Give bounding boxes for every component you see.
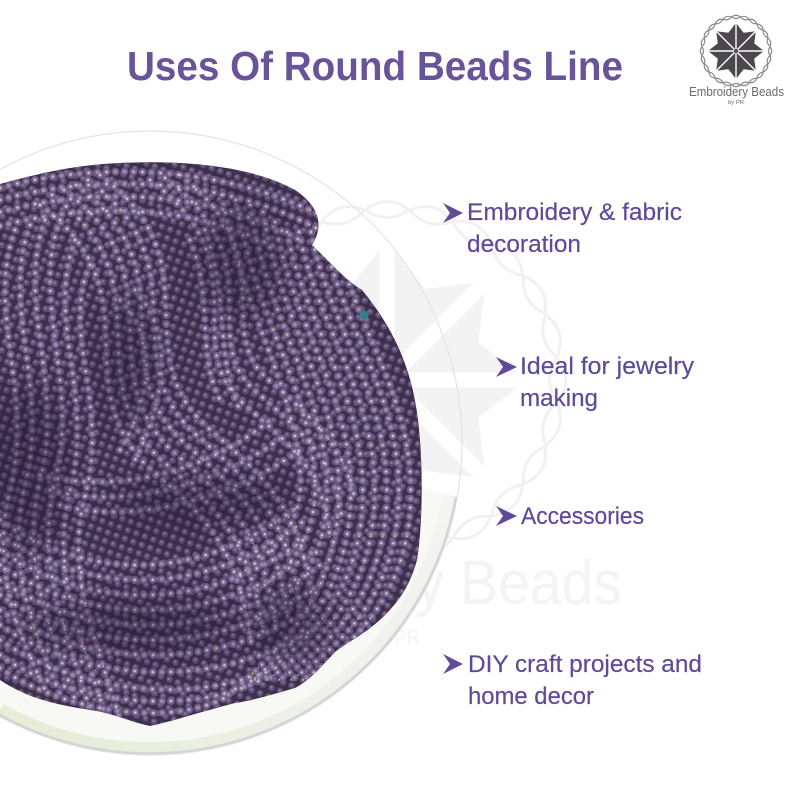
label text [520,353,694,412]
logo [689,15,784,106]
label text: decoration [467,231,581,258]
watermark: brand text: by PR [370,627,420,649]
icon: arrow [496,357,517,377]
label text: Ideal for jewelry [520,353,694,380]
bullet: accessories [496,503,644,530]
label text: Embroidery & fabric [467,199,682,226]
bullet: embroidery and fabric decoration [443,199,682,258]
label text [468,651,702,710]
label text: Accessories [521,503,644,530]
icon: arrow [443,203,463,223]
logo wordmark: Embroidery Beads [689,85,784,99]
icon: arrow [496,506,517,526]
title: Uses Of Round Beads Line [127,43,623,89]
icon: arrow [443,654,463,674]
bullet: ideal for jewelry making [496,353,694,412]
watermark: brand text [152,549,622,649]
icon: logo emblem [700,15,772,87]
watermark: brand text: Embroidery Beads [152,549,622,618]
label text [467,199,682,258]
watermark: logo emblem [208,202,566,558]
logo byline: by PR [728,100,744,106]
glass plate [0,131,462,755]
tonal shading across the strands [0,200,330,660]
photo: purple round bead strands [0,150,430,740]
label text: home decor [468,683,594,710]
label text: DIY craft projects and [468,651,702,678]
bullet: DIY craft projects and home decor [443,651,702,710]
label text: making [520,385,598,412]
